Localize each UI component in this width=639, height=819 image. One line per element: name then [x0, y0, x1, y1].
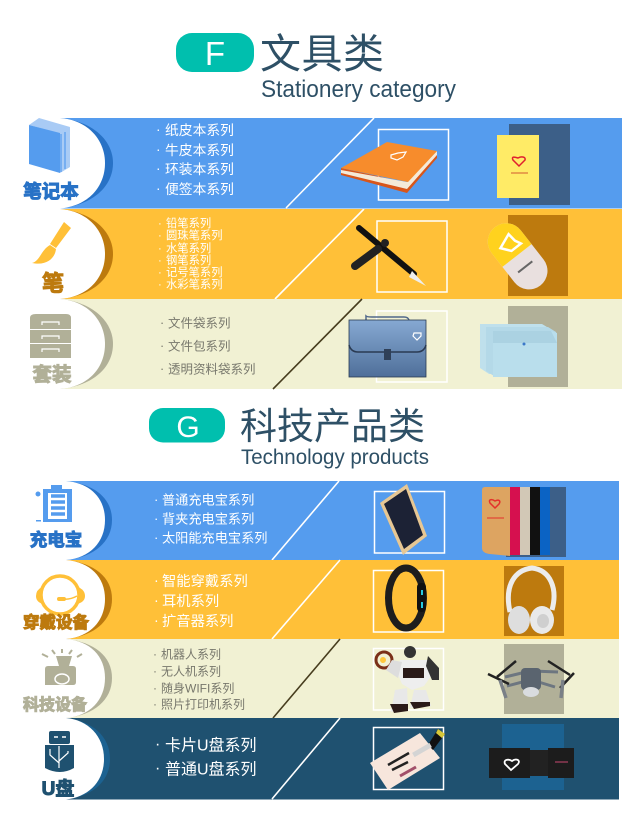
panel: power banks [0, 481, 619, 560]
panel: notebooks [0, 118, 622, 208]
backing block [508, 306, 568, 387]
list: notebook series: · [156, 181, 161, 196]
band [60, 299, 622, 389]
band [60, 209, 622, 299]
list: notebook series: · [156, 142, 161, 157]
product: USB card [370, 729, 445, 790]
list: wearable series: · [154, 613, 159, 629]
list: pen series: · [158, 230, 162, 242]
band [66, 481, 619, 560]
title: stationery Chinese: 文具类 [260, 31, 384, 77]
list: pen series: · [158, 267, 162, 279]
product: orange notebook [341, 142, 437, 193]
frame [374, 728, 444, 790]
backing block [504, 644, 564, 714]
list: power bank series: 背夹充电宝系列 [162, 512, 254, 526]
section heading: F stationery [176, 31, 456, 103]
list: power bank series: 太阳能充电宝系列 [162, 530, 268, 546]
diagonal line [273, 639, 340, 718]
list: pen series: 钢笔系列 [166, 253, 211, 267]
list: pen series: 铅笔系列 [166, 216, 211, 230]
list: notebook series: 环装本系列 [165, 162, 234, 177]
frame [377, 221, 447, 292]
list: USB series: 普通U盘系列 [165, 760, 257, 778]
crescent [0, 481, 112, 560]
list: power bank series: · [154, 530, 158, 545]
panel: wearables [0, 560, 619, 639]
product: black USB drive [489, 748, 574, 778]
list: device series [153, 647, 245, 712]
product: white headphones [508, 568, 554, 634]
diagonal line [272, 481, 339, 560]
backing block [506, 487, 566, 557]
list: file series: · [160, 339, 164, 353]
badge F [176, 33, 254, 72]
badge G: G [176, 411, 200, 444]
icon: filing cabinet [30, 314, 71, 358]
band [66, 639, 619, 718]
diagonal line [273, 299, 362, 389]
panel: tech devices [0, 639, 619, 718]
list: wearable series: · [154, 593, 159, 609]
backing block [509, 124, 570, 205]
list: power bank series: · [154, 492, 158, 507]
badge G [149, 408, 225, 444]
crescent [0, 118, 113, 208]
product: clear envelopes [480, 324, 557, 377]
diagonal line [275, 209, 364, 299]
product: solar power bank [380, 484, 427, 555]
list: file series: · [160, 316, 164, 330]
label: pen: 笔 [42, 271, 64, 296]
list: pen series: · [158, 255, 162, 267]
panel: pens [0, 209, 622, 299]
label: notebook: 笔记本 [23, 181, 79, 202]
crescent [0, 639, 112, 718]
frame [376, 311, 447, 382]
list: wearable series: 扩音器系列 [162, 613, 233, 630]
crescent [0, 209, 113, 299]
frame [378, 130, 448, 200]
list: wearable series: · [154, 573, 159, 589]
product: yellow notebook [497, 135, 539, 198]
icon: book [29, 118, 70, 173]
band [60, 118, 622, 208]
list: pen series: · [158, 243, 162, 255]
label: wearables: 穿戴设备 [23, 612, 90, 632]
panel: USB drives [0, 718, 619, 800]
list: pen series: 记号笔系列 [166, 265, 222, 279]
list: notebook series: · [156, 122, 161, 137]
badge F: F [205, 35, 225, 72]
subtitle: Technology products: Technology products [241, 446, 429, 469]
icon: USB stick [45, 731, 74, 772]
list: wearable series [154, 573, 248, 630]
crescent [0, 560, 112, 639]
list: device series: 随身WIFI系列 [161, 680, 234, 696]
label: tech devices: 科技设备 [23, 695, 87, 714]
label: power bank: 充电宝 [30, 530, 82, 550]
list: notebook series: 纸皮本系列 [165, 123, 234, 138]
backing block [508, 215, 568, 296]
list: device series: · [153, 647, 157, 661]
backing block [504, 566, 564, 636]
product: robot [376, 646, 439, 713]
list: device series: 无人机系列 [161, 664, 221, 678]
product: blue file bag [349, 316, 426, 377]
list: file series: 文件袋系列 [168, 316, 231, 330]
icon: camera flash [42, 649, 82, 685]
band [66, 718, 619, 800]
frame [374, 648, 444, 710]
list: pen series [158, 216, 222, 291]
frame [374, 570, 444, 632]
list: pen series: 圆珠笔系列 [166, 228, 222, 242]
diagonal line [272, 718, 340, 799]
list: file series: 文件包系列 [168, 338, 231, 354]
list: USB series: · [155, 736, 160, 753]
list: pen series: 水彩笔系列 [166, 277, 222, 291]
list: notebook series: 便签本系列 [165, 181, 234, 197]
product: pen [355, 228, 426, 286]
icon: brush [32, 222, 71, 264]
product: drone [488, 661, 574, 698]
section heading: G technology [149, 406, 429, 469]
label: USB: U盘 [42, 777, 74, 800]
list: notebook series: 牛皮本系列 [165, 143, 234, 158]
crescent [0, 718, 110, 800]
band [66, 560, 619, 639]
list: device series: · [153, 681, 157, 695]
list: power bank series [154, 492, 268, 546]
list: notebook series [156, 122, 234, 197]
label: sets: 套装 [32, 364, 72, 386]
frame [374, 492, 444, 553]
list: USB series: · [155, 760, 160, 777]
icon: headset [36, 576, 85, 614]
list: device series: 机器人系列 [161, 648, 221, 662]
diagonal line [272, 560, 340, 639]
list: notebook series: · [156, 161, 161, 176]
diagonal line [286, 118, 374, 208]
list: file series [160, 316, 256, 376]
list: pen series: · [158, 218, 162, 230]
list: pen series: 水笔系列 [166, 241, 211, 255]
list: power bank series: · [154, 511, 158, 526]
list: pen series: · [158, 279, 162, 291]
panel: file sets [0, 299, 622, 389]
list: device series: 照片打印机系列 [161, 698, 245, 712]
list: file series: 透明资料袋系列 [168, 362, 256, 376]
product: fitness band [388, 568, 426, 628]
title: technology Chinese: 科技产品类 [240, 406, 425, 447]
product: capsule eraser [480, 216, 555, 297]
crescent [0, 299, 113, 389]
list: USB series: 卡片U盘系列 [165, 736, 257, 754]
backing block [502, 724, 564, 790]
product: power bank colours [482, 487, 550, 556]
list: USB series [155, 736, 257, 778]
list: device series: · [153, 697, 157, 711]
list: device series: · [153, 664, 157, 678]
subtitle: Stationery category: Stationery category [261, 76, 456, 103]
list: power bank series: 普通充电宝系列 [162, 492, 254, 508]
icon: battery [36, 485, 72, 522]
list: wearable series: 耳机系列 [162, 593, 219, 610]
list: wearable series: 智能穿戴系列 [162, 573, 248, 590]
list: file series: · [160, 362, 164, 376]
